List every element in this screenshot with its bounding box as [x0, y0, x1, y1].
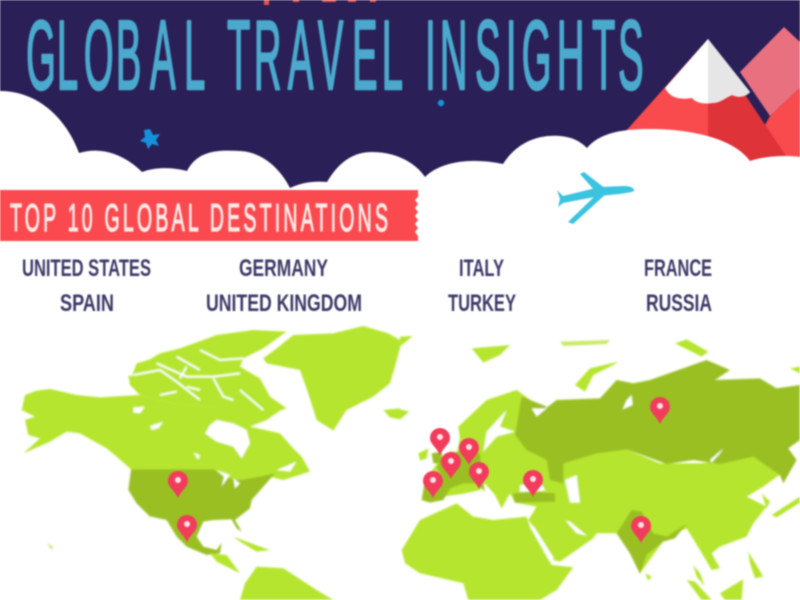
Arctic specks	[560, 340, 610, 346]
Eurasia landmass	[422, 390, 782, 573]
destination: Turkey: TURKEY	[448, 290, 516, 317]
pin: Turkey	[523, 470, 543, 497]
map: Americas	[22, 326, 400, 600]
world map	[22, 326, 800, 600]
Svalbard	[472, 345, 510, 363]
Ireland	[418, 448, 428, 461]
icon: star dot	[438, 100, 444, 106]
UK	[432, 452, 443, 463]
Japan	[772, 497, 800, 517]
Lake spots	[133, 407, 200, 460]
pin: Italy	[469, 462, 489, 489]
Korea	[762, 493, 770, 508]
pin: United States	[168, 471, 188, 498]
Hudson Bay	[205, 420, 250, 458]
icon: airplane	[557, 172, 634, 224]
pin: Spain	[423, 471, 443, 498]
destination: Germany: GERMANY	[239, 255, 328, 282]
icon: star	[140, 129, 160, 149]
pin: Russia	[650, 397, 670, 424]
France Germany Italy Spain	[422, 452, 485, 503]
Central America and Caribbean	[210, 537, 270, 573]
destination: United States: UNITED STATES	[22, 255, 151, 282]
Persian Gulf	[566, 521, 587, 536]
map: Eurasia and Africa	[400, 336, 800, 600]
pin: France	[441, 452, 461, 479]
destination: United Kingdom: UNITED KINGDOM	[206, 290, 362, 317]
front mountain left face	[600, 39, 708, 180]
Russia	[515, 360, 800, 483]
night sky header	[0, 0, 800, 195]
USA and Mexico	[128, 469, 275, 555]
Severnaya Zemlya	[675, 339, 800, 373]
snow cap shade	[708, 39, 750, 103]
Arctic channels	[133, 350, 263, 410]
destination list	[22, 255, 712, 317]
White Sea and Ob	[532, 395, 633, 417]
banner ribbon	[0, 190, 418, 241]
Southeast Asian islands	[645, 552, 763, 600]
Great lakes	[217, 470, 240, 488]
Quebec coast detail	[277, 462, 297, 472]
banner text: TOP 10 GLOBAL DESTINATIONS	[10, 196, 388, 240]
Black Sea	[520, 485, 546, 492]
pin: United Kingdom	[430, 428, 450, 455]
Africa	[402, 503, 573, 600]
snow cap	[665, 39, 750, 103]
pin: Germany	[459, 438, 479, 465]
Gulf of California	[152, 517, 170, 538]
Red Sea	[529, 526, 554, 561]
destination: Spain: SPAIN	[60, 290, 114, 317]
India	[617, 510, 687, 574]
Novaya Zemlya	[575, 362, 618, 392]
pin: Mexico	[177, 515, 197, 542]
Iceland west	[383, 408, 400, 419]
Turkey	[513, 492, 555, 503]
Canada and Alaska	[22, 389, 310, 483]
back mountain	[740, 27, 800, 116]
Iceland east	[400, 409, 409, 419]
mountains	[600, 27, 800, 180]
pin: India	[631, 516, 651, 543]
banner: top destinations	[0, 190, 418, 241]
destination: Russia: RUSSIA	[646, 290, 712, 317]
Caspian Sea	[565, 475, 580, 503]
Arctic islands	[128, 330, 287, 415]
title: GLOBAL TRAVEL INSIGHTS	[26, 1, 644, 110]
front mountain right face	[708, 39, 792, 180]
South America	[240, 567, 333, 600]
Greenland east edge	[400, 336, 413, 347]
Lake Balkhash	[710, 448, 723, 463]
Greenland	[263, 326, 400, 431]
Baltic Sea	[483, 410, 515, 452]
destination: Italy: ITALY	[459, 255, 504, 282]
cropped red top heading	[264, 0, 376, 5]
back mountain lit side	[740, 88, 800, 170]
Hawaii	[47, 543, 53, 550]
map pins	[168, 397, 670, 543]
destination: France: FRANCE	[644, 255, 712, 282]
